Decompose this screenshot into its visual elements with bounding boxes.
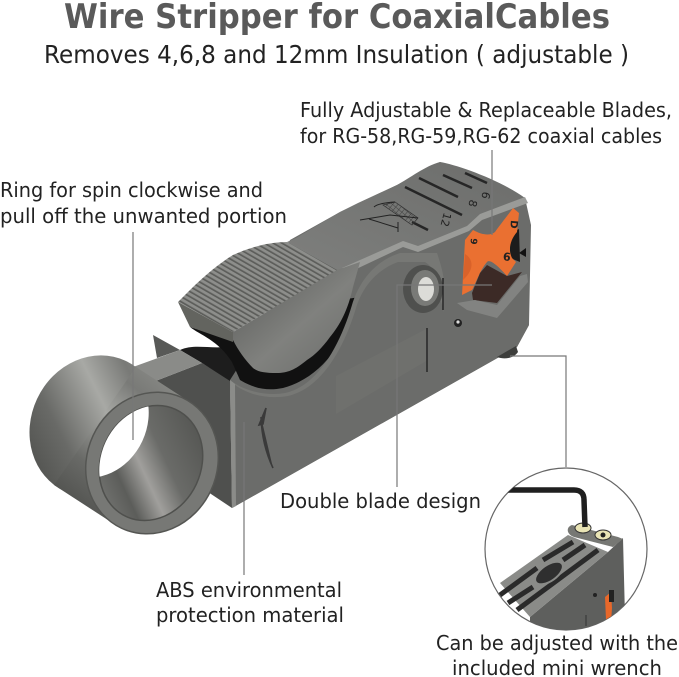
orange blade in inset [605,594,612,620]
label: ring [0,178,287,228]
top plate [287,162,525,270]
lever side [233,262,360,373]
pivot screw [403,265,443,313]
illustration: wire stripper tool [7,162,531,556]
orange blade: 9 [503,249,511,263]
ring hole opening [99,406,149,477]
ring front rim [63,370,241,556]
small screw [454,319,462,327]
body side flank ridge [230,253,444,425]
label: blades [300,98,672,148]
orange blade [462,208,519,295]
tab bar [133,350,202,382]
body arrow [259,408,273,468]
label: ABS: protection material [156,603,344,627]
blade guard [457,274,528,318]
body label recess [336,328,428,414]
orange blade: 9 [467,238,478,245]
dark blade slot [472,265,522,303]
label: wrench [436,631,678,677]
body side panel [232,262,529,508]
lever grip front [178,302,233,342]
plate scale numbers: 12 [437,211,454,228]
tool top in inset [500,535,608,617]
ring inner wall [81,388,221,538]
foot [497,346,518,358]
hex wrench [505,490,585,527]
wedge behind blade [510,229,520,262]
cable diagram on plate [360,202,418,232]
label: ring: Ring for spin clockwise and [0,178,263,202]
back tab [153,335,180,358]
plate scale numbers: 8 [465,198,480,208]
tool silhouette [230,162,531,508]
ring outer band [7,334,193,522]
plate scale numbers: 6 [478,190,493,200]
lever ridged grip [178,242,337,332]
inset: wrench detail [485,468,647,640]
label: double blade: Double blade design [280,489,481,513]
raised block with two screws [568,525,623,547]
label: ABS: ABS environmental [156,578,342,602]
plate scale numbers [437,190,493,228]
subtitle: Removes 4,6,8 and 12mm Insulation ( adjustable ) [44,40,629,69]
dark gap under lever [190,297,360,389]
oval slot [536,562,562,584]
leader lines [133,150,566,575]
body left end face [153,363,232,508]
tool side in inset [530,538,625,640]
label: blades: for RG-58,RG-59,RG-62 coaxial cables [300,124,662,148]
orange blade: D [507,220,519,229]
label: ring: pull off the unwanted portion [0,204,287,228]
curved dark underside [180,346,240,382]
label: ABS [156,578,344,627]
plate scale slots [405,173,487,230]
